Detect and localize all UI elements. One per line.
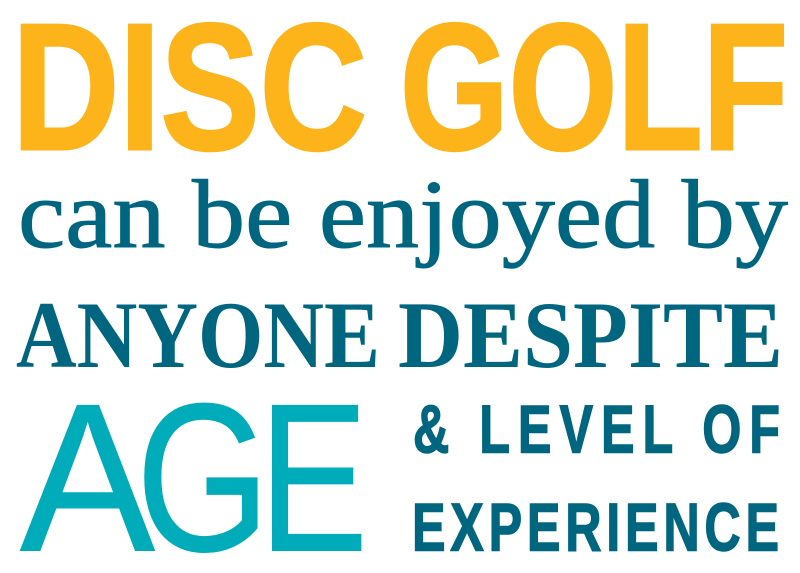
text: and level of: & LEVEL OF [413,391,780,467]
text: anyone despite: DESPITE [398,282,783,388]
title: disc golf [12,0,788,188]
text: anyone despite [16,282,783,388]
text: can be enjoyed by: can be enjoyed by [18,161,789,268]
text: age [20,360,368,573]
text: experience: EXPERIENCE [412,489,779,565]
text: anyone despite: ANYONE [16,282,380,388]
